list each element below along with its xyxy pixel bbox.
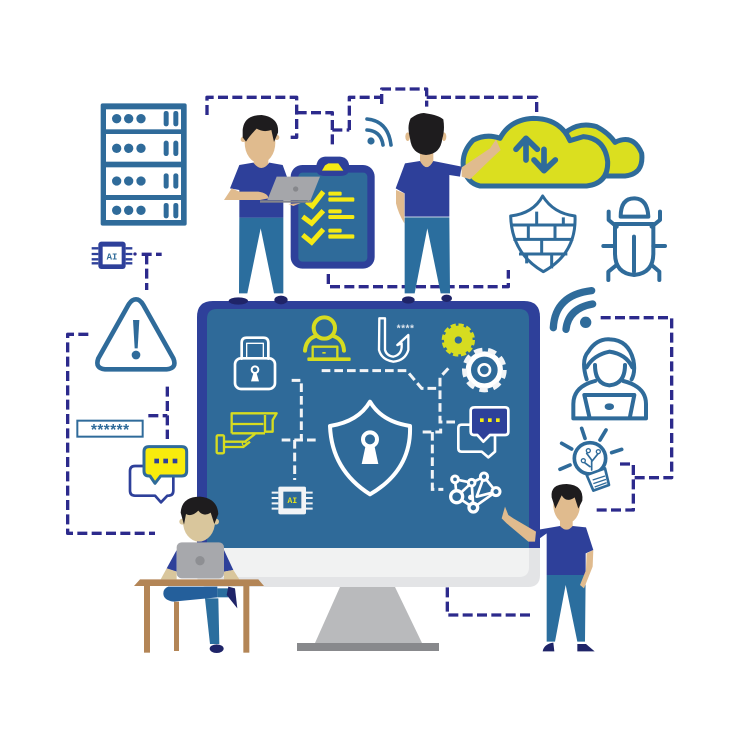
icon: chat bubbles — [130, 447, 187, 502]
icon: AI chip — [92, 242, 132, 269]
icon: user with laptop — [305, 317, 351, 361]
icon: small wifi — [367, 119, 391, 145]
crossed legs — [163, 587, 237, 653]
monitor stand — [297, 587, 439, 651]
bottom figures — [134, 484, 595, 653]
person head — [241, 115, 279, 163]
monitor screen — [207, 309, 529, 548]
person with laptop on monitor — [224, 115, 320, 305]
torso and arms — [161, 550, 239, 579]
right connector lines — [594, 318, 672, 510]
laptop — [260, 177, 320, 203]
password field — [77, 421, 143, 440]
icon: clipboard checklist — [291, 157, 375, 269]
icon: chat bubbles — [458, 407, 508, 457]
head — [179, 497, 219, 542]
icon: neural network — [451, 473, 500, 512]
icon: padlock — [235, 338, 275, 389]
icon: firewall shield — [511, 196, 575, 272]
left column icons — [68, 242, 187, 533]
person body — [224, 158, 301, 305]
person pointing at cloud — [396, 113, 665, 304]
person at desk — [134, 497, 264, 653]
person head — [405, 113, 446, 155]
icon: security camera — [217, 413, 277, 453]
cloud icon — [463, 118, 642, 186]
icon: central shield — [330, 402, 410, 494]
icon: lime gear — [443, 325, 474, 355]
password connector — [148, 387, 167, 439]
left connector line — [68, 334, 155, 533]
person pointing at screen — [502, 484, 595, 651]
icon: idea bulb — [560, 428, 622, 491]
icon: white gear — [464, 350, 504, 390]
connector lines — [282, 368, 455, 489]
monitor — [197, 301, 540, 651]
icon: phishing hook: **** — [396, 324, 415, 335]
AI chip connector — [133, 252, 162, 290]
desk back leg and chair — [174, 602, 179, 651]
icon: phishing hook — [379, 318, 415, 362]
screen icons — [217, 317, 508, 514]
icon: AI chip on screen: AI — [288, 497, 297, 506]
bottom connector line — [447, 587, 533, 615]
person body — [396, 139, 501, 304]
icon: hacker — [573, 339, 646, 418]
monitor casing — [197, 301, 540, 587]
icon: AI chip: AI — [107, 252, 117, 262]
icon: bug — [603, 198, 665, 280]
icon: warning triangle — [97, 299, 174, 369]
icon: server rack — [101, 103, 187, 226]
desk — [134, 579, 264, 653]
password field: ****** — [89, 422, 131, 440]
body — [502, 507, 595, 651]
icon: large wifi — [553, 291, 593, 329]
top connector lines — [207, 89, 537, 287]
head — [552, 484, 582, 523]
icon: AI chip on screen — [272, 487, 313, 514]
right column icons — [553, 291, 672, 510]
laptop — [177, 542, 224, 578]
